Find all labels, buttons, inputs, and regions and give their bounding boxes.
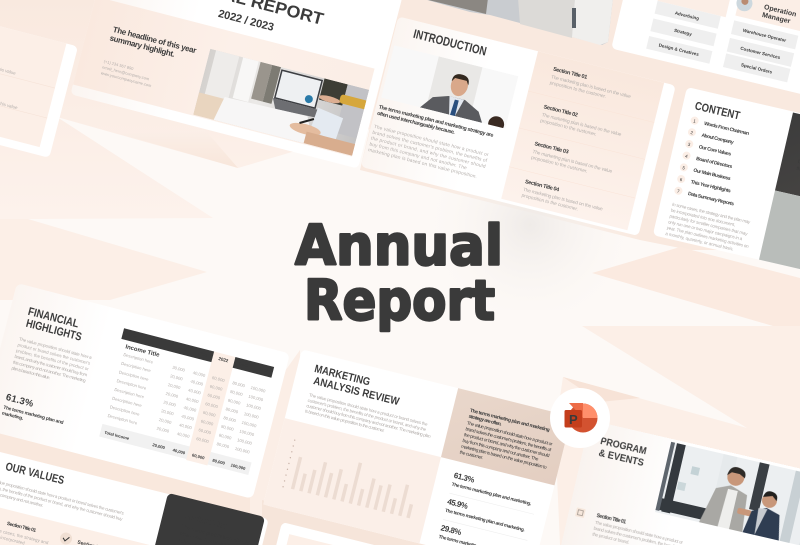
table: income: 60,000 (209, 384, 224, 392)
list: table of contents: This Year Highlights (690, 179, 732, 194)
text: marketing paragraph: The value proposition should state how a product or brand solves the (309, 392, 429, 427)
text: marketing paragraph: customer's problem, the benefits of the product or brand, and why the (307, 398, 427, 432)
slide: program and events (556, 420, 800, 545)
slide: introduction (361, 16, 676, 236)
org chart left column: Advertising (674, 10, 700, 21)
photo: grey office (759, 190, 800, 284)
icon: tick circle right (59, 531, 73, 545)
list: table of contents: Data Summary Reports (687, 191, 735, 208)
table: income: Year (127, 332, 138, 340)
table: income: 100,000 (250, 385, 267, 394)
text: section 01: the product or brand. (592, 532, 630, 545)
text: marketing paragraph: customer should buy from this company and not another. The marketing plan (306, 403, 432, 439)
text: content paragraph: In some cases, the strategy and the plan may (672, 202, 752, 225)
table: income: 60,000 (192, 452, 206, 461)
text: financial paragraph: brand, and why the customer should buy from (14, 354, 88, 377)
table: income: Total Income (104, 430, 130, 441)
text: body paragraph (367, 124, 490, 182)
text: content paragraph: year. The plan outlines marketing activities on (666, 225, 750, 249)
text: financial paragraph: product or brand solves the customer's (17, 342, 92, 366)
table: income: Description here (114, 387, 145, 400)
icon: section square (575, 507, 586, 518)
text: dark block (796, 152, 800, 178)
panel: brown callout (441, 388, 572, 485)
text: section 01: Section Title 01 (596, 513, 627, 526)
table: income: 100,000 (237, 437, 253, 446)
panel: dark block (775, 112, 800, 215)
text: contact: email_here@company.com (102, 64, 151, 82)
text: section title 01 (0, 516, 51, 545)
text: contact: www.yourcompanyname.com (100, 70, 153, 88)
table: income: 40,000 (190, 379, 204, 387)
table: income: 100,000 (241, 420, 258, 429)
text: callout: strategy are often. (468, 414, 503, 428)
table: income: 20,000 (161, 408, 175, 416)
text: section 01: The marketing plan is based on the value (550, 74, 632, 100)
heading: financial highlights (24, 306, 86, 344)
table: income (96, 328, 276, 476)
slide: annual report cover: summary highlight. (109, 33, 176, 59)
stat: 45.9%: The terms marketing plan and marketing. (444, 508, 525, 533)
slide: top centre photo (420, 0, 613, 45)
list: table of contents: 1 (693, 118, 697, 124)
text: operation manager: Operation (763, 4, 797, 19)
text: contact: (+1) 234 567 890 (103, 59, 135, 71)
table: income: 80,000 (227, 398, 242, 406)
org chart right column: Warehouse Operator (742, 28, 787, 43)
heading: marketing analysis review: ANALYSIS REVIEW (312, 375, 401, 408)
table: income: 60,000 (212, 375, 226, 383)
text: section title 01: Section Title 01 (6, 521, 37, 534)
text: body paragraph: the product or brand, and why the customer should (370, 136, 487, 170)
text: marketing paragraph (305, 392, 434, 444)
org chart right column (723, 20, 798, 82)
table: income: 60,000 (205, 401, 219, 409)
org chart right column: Customer Services (740, 46, 781, 60)
list: table of contents: Words From Chairman (703, 121, 750, 137)
table: income: 80,000 (232, 380, 246, 388)
text: callout: The terms marketing plan and marketing (469, 408, 550, 433)
table: income: 30,000 (172, 365, 186, 373)
text: section 04: The marketing plan is based on the value (522, 187, 604, 213)
text: section title: Section Title (183, 511, 229, 531)
text: financial paragraph: problem, the benefits of the product or (15, 348, 90, 372)
icon: powerpoint badge (550, 388, 610, 448)
table: income: 20,000 (170, 373, 184, 382)
table: income: 2021 (198, 351, 209, 358)
panel: peach cover band (73, 0, 375, 157)
text: section 01: proposition to the customer. (549, 80, 607, 100)
list: table of contents: About Company (701, 133, 735, 146)
table: income: 20,000 (158, 417, 173, 425)
text: content paragraph (665, 202, 755, 255)
icon: avatar (735, 0, 754, 13)
table: income: 100,000 (239, 428, 255, 437)
table: income: 60,000 (198, 427, 212, 435)
text: section 02 (540, 104, 624, 144)
table: income: 40,000 (176, 431, 191, 439)
slide: content (653, 87, 800, 285)
table: income: Description here (109, 404, 141, 417)
text: section 01: The value proposition should state how a product or (595, 520, 684, 545)
heading: our values: OUR VALUES (4, 461, 66, 487)
table: income: 100,000 (246, 402, 262, 411)
slide: annual report cover (70, 0, 403, 169)
slide: marketing analysis review (263, 349, 572, 545)
bar chart (282, 439, 422, 519)
table: income: 40,000 (181, 414, 195, 422)
text: financial paragraph: The value proposition should state how a (18, 336, 93, 360)
slide: our values (0, 445, 269, 545)
title (295, 214, 503, 332)
table: income: 100,000 (230, 462, 247, 471)
stat: 29.8% (438, 523, 522, 545)
table: income: 80,000 (225, 406, 239, 415)
text: operation manager: Manager (761, 12, 791, 25)
table: income: Description here (121, 361, 152, 373)
table: income: 20,000 (163, 400, 177, 408)
text: callout: buy from this company and not another. The (462, 438, 539, 462)
heading: marketing analysis review: MARKETING (313, 363, 371, 388)
panel: chart background (263, 418, 441, 543)
text: section 04: proposition to the customer. (521, 193, 579, 213)
text: body paragraph: brand solves the customer's problem, the benefits of (372, 130, 488, 164)
stat: 45.9%: 45.9% (446, 497, 469, 511)
table: income: 60,000 (203, 410, 217, 418)
text: marketing paragraph: is based on this value proposition to the customer. (305, 408, 385, 433)
text: financial paragraph (11, 336, 93, 389)
org chart left column: Strategy (674, 28, 693, 37)
table: income: 2024 (258, 366, 269, 374)
text: content paragraph: only run one or two major campaigns in a (668, 219, 743, 241)
text: callout: the product or brand, and why the customer should (464, 432, 550, 458)
table: income: 80,000 (216, 441, 230, 449)
table: income: 80,000 (223, 415, 237, 423)
table: income: 40,000 (192, 370, 206, 378)
stat: 61.3%: 61.3% (453, 471, 475, 485)
org chart right column: Special Orders (741, 62, 773, 75)
photo: smiling businessman (420, 56, 504, 128)
slide: bottom centre fragment (272, 522, 428, 545)
text: headline: The headline of this year (112, 25, 197, 55)
text: financial paragraph: plan is based on this value. (11, 365, 51, 380)
text: body paragraph: marketing plan is based on this value proposition. (367, 147, 477, 180)
stat: 29.8%: 29.8% (440, 523, 462, 537)
icon: powerpoint badge: P (569, 412, 578, 427)
list: table of contents: 2 (690, 130, 694, 136)
panel: dark section (141, 493, 265, 545)
text: section 03: The marketing plan is based on the value (532, 149, 613, 175)
text: content paragraph: particularly for smaller companies that may (669, 213, 749, 236)
text: content paragraph: be incorporated into one document, (670, 208, 736, 227)
text: section 01 (549, 67, 634, 106)
stat: 61.3% (1, 392, 67, 432)
heading: content: CONTENT (694, 100, 741, 122)
heading: introduction: INTRODUCTION (412, 27, 488, 59)
text: section 02: The marketing plan is based on the value (541, 112, 622, 138)
list: table of contents: 4 (685, 153, 689, 159)
table: income: Description here (118, 369, 150, 382)
stat: 61.3% (451, 471, 535, 507)
table: income: 2022 (218, 356, 229, 363)
text: section 04: Section Title 04 (524, 179, 561, 194)
list: table of contents: Our Core Values (698, 144, 732, 158)
text: financial paragraph: this company and not another. The marketing (12, 360, 87, 383)
table: income: 60,000 (196, 436, 210, 444)
slide: org chart (611, 0, 800, 109)
org chart left column: Design & Creatives (658, 43, 700, 57)
table: income: Description here (107, 413, 139, 426)
table: income: 20,000 (156, 426, 170, 434)
photo: laptop and hands on desk (193, 49, 371, 156)
table: income: Description here (123, 352, 154, 365)
table: income: 20,000 (152, 442, 166, 450)
list: table of contents: 3 (687, 142, 691, 147)
table: income: 40,000 (172, 447, 186, 456)
text: callout (459, 408, 557, 476)
slide fragment: top left (0, 0, 78, 158)
stat: 61.3%: marketing. (1, 410, 24, 422)
list: table of contents (674, 116, 751, 208)
text: section 02: Section Title 02 (543, 104, 578, 119)
table: income: Description here (112, 396, 143, 408)
text: callout: brand solves the customer's problem, the benefits of (465, 426, 552, 453)
table: income: 100,000 (248, 394, 264, 402)
text: callout: the customer. (459, 450, 484, 460)
text: contact (100, 59, 156, 88)
text: bold lead: The terms marketing plan and marketing strategy are (378, 104, 494, 139)
org chart left column (646, 1, 721, 64)
text: years: 2022 / 2023 (217, 8, 275, 34)
text: content paragraph: a monthly, quarterly, or annual basis. (665, 231, 734, 252)
text: section 03: Section Title 03 (534, 141, 569, 156)
text: operation manager (761, 4, 797, 26)
title: Annual (295, 214, 503, 278)
slide: financial highlights (0, 283, 290, 499)
table: income: 40,000 (185, 396, 200, 404)
table: income: Description here (116, 378, 148, 391)
table: income: 80,000 (221, 424, 235, 432)
heading: financial highlights: HIGHLIGHTS (25, 318, 83, 344)
text: section 04 (521, 179, 606, 218)
photo: two businessmen with phone (654, 442, 800, 545)
table: income: 20,000 (167, 382, 182, 390)
stat: 45.9% (444, 497, 528, 533)
stat: 61.3%: The terms marketing plan and (3, 405, 64, 426)
table: income: 60,000 (207, 392, 221, 401)
heading: financial highlights: FINANCIAL (27, 306, 80, 331)
text: body paragraph: The value proposition should state how a product or (373, 124, 489, 158)
table: income: 40,000 (183, 405, 197, 413)
panel: section list (501, 51, 664, 230)
text: section 03 (530, 141, 615, 181)
table: income: 100,000 (243, 411, 260, 420)
heading: program and events: PROGRAM (599, 435, 648, 457)
title: Report (304, 268, 495, 332)
list: table of contents: Our Main Business (693, 168, 731, 182)
text: section 01: Section Title 01 (552, 67, 588, 81)
table: income: 40,000 (188, 387, 202, 396)
text: section 02: proposition to the customer. (540, 118, 597, 138)
list: table of contents: 7 (677, 189, 681, 194)
table: income: 80,000 (212, 458, 226, 466)
table: income: 60,000 (200, 419, 215, 427)
stat: 61.3%: The terms marketing plan and marketing. (451, 482, 532, 507)
heading: marketing analysis review (310, 363, 404, 408)
table: income: 20,000 (165, 391, 179, 399)
table: income: 2023 (238, 361, 250, 369)
text: body paragraph: buy from this company and not another. The (369, 141, 468, 171)
table: income: 100,000 (234, 446, 251, 455)
text: bold lead: often used interchangeably because. (376, 111, 456, 136)
table: income: 80,000 (218, 432, 233, 441)
text: callout: The value proposition should state how a product or (466, 420, 553, 447)
list: table of contents: Board of Directors (695, 156, 733, 170)
text: callout: marketing plan is based on the value proposition to (461, 444, 548, 470)
list: table of contents: 5 (682, 165, 686, 171)
text: section 03: proposition to the customer. (530, 155, 588, 175)
heading: program and events: & EVENTS (597, 447, 645, 469)
table: income: 2020 (177, 345, 189, 353)
list: table of contents: 6 (679, 177, 683, 182)
table: income: 40,000 (179, 422, 193, 430)
stat: 61.3%: 61.3% (5, 392, 35, 410)
table: income: Income Title (125, 344, 161, 359)
table: income: 80,000 (230, 389, 244, 397)
heading: program and events (597, 435, 648, 469)
